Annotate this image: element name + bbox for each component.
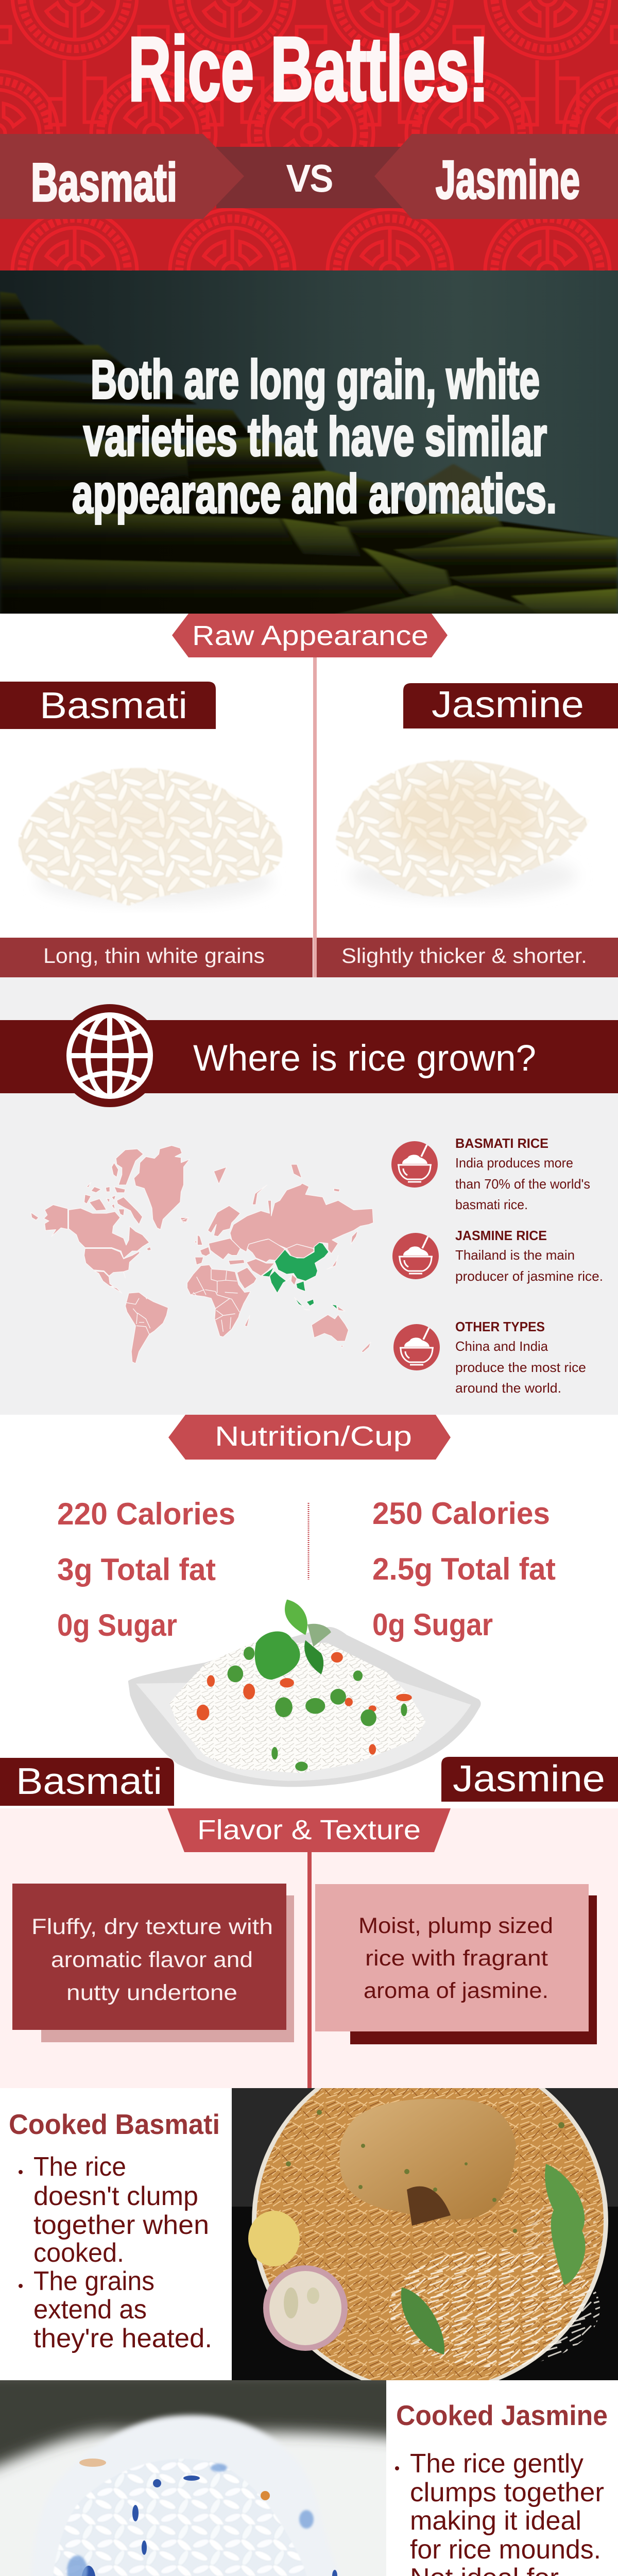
legend text: produce the most rice xyxy=(455,1360,586,1375)
panel: where is rice grown xyxy=(0,977,618,1415)
panel: raw appearance xyxy=(0,614,618,977)
card text: Fluffy, dry texture with xyxy=(31,1914,273,1939)
map: highlighted green countries xyxy=(262,1243,337,1310)
bullet list: The rice gently xyxy=(410,2449,583,2479)
mint leaves xyxy=(401,2287,444,2354)
card text xyxy=(358,1913,553,2003)
versus band right xyxy=(374,134,618,219)
lower terraces xyxy=(0,464,618,618)
legend text xyxy=(455,1136,590,1212)
versus band centre xyxy=(216,147,404,208)
card text: aroma of jasmine. xyxy=(364,1978,548,2003)
icon: mint leaves xyxy=(255,1600,331,1680)
biryani photo xyxy=(232,2088,618,2380)
Jasmine label text: Jasmine xyxy=(432,684,584,725)
Jasmine label text: Jasmine xyxy=(453,1758,605,1800)
bullet list xyxy=(19,2152,212,2353)
jasmine rice photo xyxy=(0,2380,386,2576)
panel: cooked jasmine xyxy=(0,2370,618,2576)
legend text: China and India xyxy=(455,1338,548,1354)
bullet list: together when xyxy=(33,2210,209,2240)
card text: nutty undertone xyxy=(66,1980,237,2005)
versus band left xyxy=(0,134,244,219)
chicken xyxy=(339,2099,516,2219)
heading banner xyxy=(172,614,448,657)
basmati raw rice pile xyxy=(19,768,282,906)
icon: globe xyxy=(58,1004,161,1107)
panel: flavor and texture xyxy=(0,1808,618,2088)
Basmati label xyxy=(0,1758,174,1806)
card text: Moist, plump sized xyxy=(358,1913,553,1938)
jasmine nutrition values: 0g Sugar xyxy=(372,1607,493,1642)
Jasmine label xyxy=(441,1757,618,1802)
photo shading xyxy=(0,270,618,614)
map: Eurasia, Africa and Oceania xyxy=(180,1164,373,1352)
legend text: OTHER TYPES xyxy=(455,1319,545,1334)
lemon xyxy=(248,2211,300,2266)
jasmine nutrition values xyxy=(372,1496,556,1642)
basmati nutrition values xyxy=(57,1497,235,1642)
caption left text: Long, thin white grains xyxy=(43,944,265,968)
bullet list: they're heated. xyxy=(33,2324,212,2353)
onion slice xyxy=(263,2265,348,2351)
caption right text: Slightly thicker & shorter. xyxy=(341,944,587,968)
Basmati label xyxy=(0,682,216,729)
legend text: JASMINE RICE xyxy=(455,1228,547,1243)
legend text: Thailand is the main xyxy=(455,1247,575,1263)
card text: aromatic flavor and xyxy=(51,1947,253,1972)
card text: rice with fragrant xyxy=(365,1946,548,1971)
caption bar left xyxy=(0,938,313,977)
bullet list: cooked. xyxy=(33,2238,124,2268)
plate of rice photo xyxy=(128,1600,481,1787)
vs label: vs xyxy=(287,147,333,202)
basmati card xyxy=(12,1884,294,2042)
icon: rice bowl xyxy=(393,1324,440,1370)
heading: Cooked Jasmine xyxy=(396,2399,608,2431)
bullet list xyxy=(395,2449,604,2576)
bullet list: for rice mounds. xyxy=(410,2535,601,2565)
heading text: Raw Appearance xyxy=(192,620,428,651)
legend: basmati rice xyxy=(391,1136,590,1212)
legend text xyxy=(455,1228,603,1284)
map: Americas xyxy=(31,1145,190,1364)
jasmine nutrition values: 2.5g Total fat xyxy=(372,1552,556,1586)
heading banner xyxy=(168,1415,451,1460)
dotted divider xyxy=(308,1503,309,1580)
icon: rice bowl xyxy=(392,1233,439,1279)
basmati nutrition values: 0g Sugar xyxy=(57,1608,177,1642)
red patterned background xyxy=(0,0,618,270)
bullet list: The grains xyxy=(33,2266,154,2296)
heading: Cooked Basmati xyxy=(9,2108,220,2140)
legend text: around the world. xyxy=(455,1380,561,1396)
icon: rice bowl xyxy=(391,1141,438,1188)
legend text xyxy=(455,1319,586,1396)
Jasmine label xyxy=(403,683,618,728)
panel: nutrition per cup xyxy=(0,1415,618,1808)
heading text: Nutrition/Cup xyxy=(215,1421,412,1452)
legend: jasmine rice xyxy=(392,1228,603,1284)
hero statement xyxy=(72,349,557,524)
header panel xyxy=(0,0,618,270)
legend text: basmati rice. xyxy=(455,1197,528,1212)
basmati nutrition values: 220 Calories xyxy=(57,1497,235,1531)
section heading: Where is rice grown? xyxy=(193,1038,536,1079)
legend text: producer of jasmine rice. xyxy=(455,1268,603,1284)
divider line xyxy=(307,1852,312,2088)
card text xyxy=(31,1914,273,2005)
Basmati label text: Basmati xyxy=(16,1761,162,1802)
legend text: BASMATI RICE xyxy=(455,1136,548,1151)
bullet list: The rice xyxy=(33,2152,126,2182)
bullet list: making it ideal xyxy=(410,2506,581,2536)
legend text: India produces more xyxy=(455,1155,573,1171)
world map xyxy=(31,1145,373,1364)
upper terraces xyxy=(0,292,327,513)
divider line xyxy=(313,657,317,977)
jasmine raw rice pile xyxy=(336,760,590,899)
sky xyxy=(0,270,618,614)
panel: cooked basmati xyxy=(0,2047,618,2394)
bullet list: extend as xyxy=(33,2295,147,2325)
jasmine card xyxy=(315,1884,597,2044)
Basmati label text: Basmati xyxy=(40,685,187,726)
section band xyxy=(0,1020,618,1093)
bullet list: doesn't clump xyxy=(33,2181,198,2211)
Basmati heading: Basmati xyxy=(31,152,177,213)
legend: other types xyxy=(393,1319,586,1396)
caption bar right xyxy=(317,938,618,977)
hero panel: rice terraces photo xyxy=(0,270,618,618)
heading text: Flavor & Texture xyxy=(197,1815,421,1845)
legend text: than 70% of the world's xyxy=(455,1176,590,1192)
basmati nutrition values: 3g Total fat xyxy=(57,1552,216,1587)
jasmine nutrition values: 250 Calories xyxy=(372,1496,550,1531)
bullet list: clumps together xyxy=(410,2478,604,2507)
heading banner xyxy=(167,1808,451,1852)
